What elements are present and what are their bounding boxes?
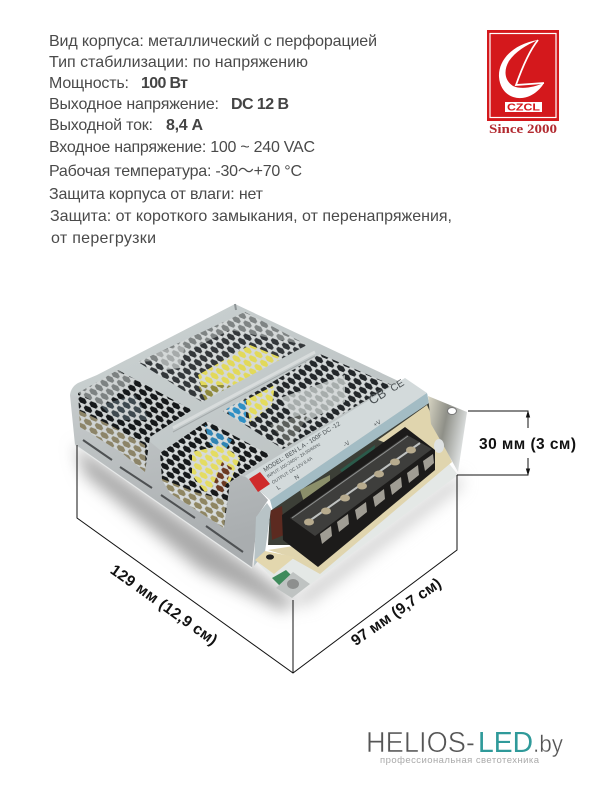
- HELIOS-LED logo: .by: [533, 731, 563, 758]
- label sticker: [245, 378, 427, 500]
- specifications text block: 8,4 А: [166, 117, 203, 134]
- HELIOS-LED logo: HELIOS-: [366, 727, 475, 759]
- dimension label: length: 129 мм (12,9 см): [107, 562, 220, 649]
- perforated panel: left wrap: [78, 370, 192, 472]
- red mini logo on label: [249, 472, 270, 492]
- label small print: L: [276, 484, 282, 492]
- label small print: INPUT: 100-240V~ 2A 50/60Hz: [266, 441, 322, 479]
- front corner bracket: [254, 503, 271, 566]
- CZCL brand logo: [487, 30, 559, 136]
- specifications text block: Входное напряжение: 100 ~ 240 VAC: [49, 139, 315, 156]
- label blue edge: [270, 393, 429, 511]
- perforated panel: front wrap: [160, 421, 270, 528]
- specifications text block: Защита: от короткого замыкания, от перенапряжения,: [50, 208, 452, 225]
- specifications text block: [49, 33, 452, 247]
- specifications text block: Тип стабилизации: по напряжению: [49, 54, 308, 71]
- drop shadow under power supply: [75, 445, 462, 612]
- specifications text block: Рабочая температура: -30～+70 °C: [49, 163, 302, 180]
- clear terminal cover: [290, 435, 432, 536]
- interior dark cavity: [268, 403, 445, 545]
- label small print: CE: [389, 378, 407, 395]
- specifications text block: 100 Вт: [141, 75, 188, 92]
- label small print: CB: [366, 385, 389, 408]
- label small print: OUTPUT: DC 12V 8.4A: [271, 456, 313, 485]
- label small print: [262, 378, 407, 492]
- label small print: N: [294, 474, 301, 482]
- HELIOS-LED logo: LED: [478, 727, 533, 759]
- base plate: [255, 452, 458, 598]
- dimension lines: length and width: [77, 445, 457, 673]
- power supply unit photo: [70, 304, 467, 598]
- left side face: [70, 395, 268, 568]
- edge highlights: [75, 445, 252, 568]
- specifications text block: DC 12 В: [231, 96, 289, 113]
- right metal bracket: [428, 396, 467, 472]
- terminal contacts: [320, 454, 434, 544]
- HELIOS-LED logo: [366, 727, 563, 766]
- label small print: +V: [373, 420, 382, 429]
- CZCL brand logo: Since 2000: [489, 122, 557, 136]
- capacitor red component: [270, 506, 284, 540]
- green board inside: [340, 445, 375, 482]
- perforated panel: back top: [138, 312, 306, 402]
- specifications text block: Выходное напряжение:: [49, 96, 219, 113]
- dimension label: width: 97 мм (9,7 см): [348, 575, 445, 650]
- dimension: height bracket: [457, 411, 530, 475]
- CZCL brand logo: CZCL: [507, 102, 540, 114]
- specifications text block: Мощность:: [49, 75, 129, 92]
- specifications text block: Защита корпуса от влаги: нет: [49, 186, 264, 203]
- specifications text block: Вид корпуса: металлический с перфорацией: [49, 33, 377, 50]
- terminal screws: [304, 446, 416, 526]
- label small print: MODEL: BEN L A - 100F DC -12: [262, 420, 342, 474]
- side slots: [83, 440, 243, 552]
- main top face: [70, 304, 428, 500]
- beige PCB: [268, 405, 452, 574]
- green PCB corner and screw: [272, 570, 292, 586]
- terminal side post: [434, 439, 444, 453]
- specifications text block: от перегрузки: [51, 230, 156, 247]
- specifications text block: Выходной ток:: [49, 117, 153, 134]
- mounting tab with hole: [255, 551, 295, 574]
- dimension label: height: 30 мм (3 см): [479, 436, 576, 453]
- terminal block: [282, 427, 435, 567]
- HELIOS-LED logo: профессиональная светотехника: [380, 755, 540, 766]
- perforated panel: front top: [223, 354, 392, 449]
- label small print: -V: [343, 440, 351, 449]
